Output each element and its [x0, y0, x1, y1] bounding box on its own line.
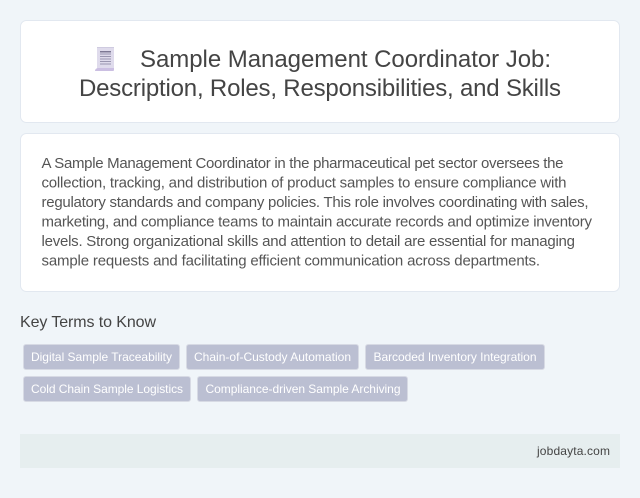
- text block: description: levels. Strong organizational skills and attention to detail are essential for managing: [42, 233, 575, 250]
- tags: key terms: [24, 344, 544, 402]
- tag: barcoded inventory integration: Barcoded Inventory Integration: [374, 350, 536, 364]
- heading: key terms: Key Terms to Know: [20, 314, 156, 331]
- tag: compliance-driven sample archiving: [198, 376, 408, 402]
- footer: jobdayta.com: [536, 444, 610, 458]
- tag: chain-of-custody automation: [186, 344, 358, 370]
- icon: document scroll: [95, 47, 114, 71]
- tag: digital sample traceability: [24, 344, 180, 370]
- text block: description: [42, 155, 592, 270]
- tag: digital sample traceability: Digital Sample Traceability: [31, 350, 172, 364]
- heading: [79, 46, 561, 102]
- tag: barcoded inventory integration: [366, 344, 544, 370]
- text block: description: regulatory standards and company policies. This role involves coordinating with sales,: [42, 194, 588, 211]
- tag: cold chain sample logistics: Cold Chain Sample Logistics: [31, 382, 183, 396]
- tag: cold chain sample logistics: [24, 376, 190, 402]
- panel: title card: [20, 20, 620, 122]
- text block: description: sample requests and facilitating efficient communication across departments.: [42, 252, 540, 270]
- text block: description: collection, tracking, and distribution of product samples to ensure compliance with: [42, 174, 566, 192]
- heading: Description, Roles, Responsibilities, and Skills: [79, 75, 561, 102]
- text block: description: A Sample Management Coordinator in the pharmaceutical pet sector oversees the: [42, 155, 564, 172]
- panel: description: [20, 134, 620, 292]
- heading: Sample Management Coordinator Job:: [140, 46, 551, 73]
- tag: compliance-driven sample archiving: Compliance-driven Sample Archiving: [206, 382, 400, 396]
- text block: description: marketing, and compliance teams to maintain accurate records and optimize inventory: [42, 214, 592, 230]
- footer: [20, 434, 620, 468]
- tag: chain-of-custody automation: Chain-of-Custody Automation: [194, 350, 351, 364]
